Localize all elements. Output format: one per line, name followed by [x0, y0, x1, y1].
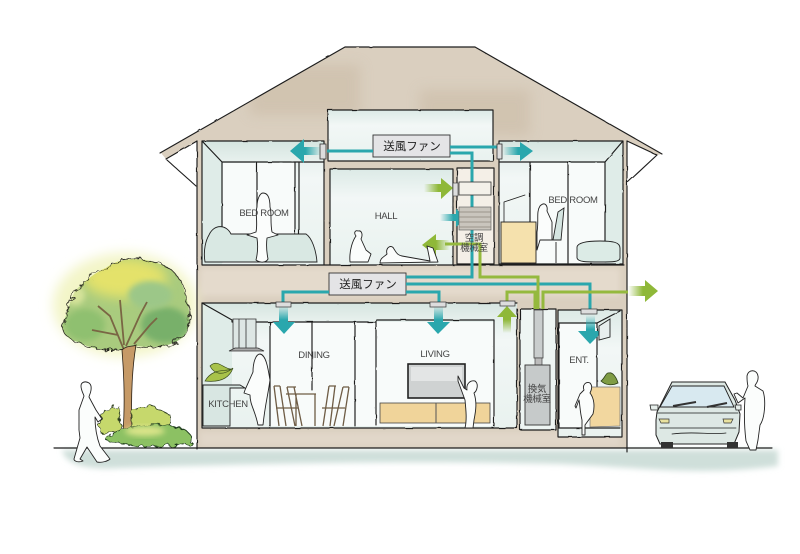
- green exhaust ducts: [445, 244, 628, 309]
- desk: [501, 222, 536, 263]
- tree: [53, 250, 197, 446]
- attic fan room: [328, 110, 493, 161]
- person by car: [734, 371, 765, 450]
- lying person: [380, 246, 438, 263]
- room labels: ENT.: [569, 355, 589, 366]
- wall mirror: [599, 319, 610, 340]
- person walking: [74, 382, 110, 462]
- arrow: teal right upper: [503, 142, 533, 161]
- tree branches: [92, 300, 157, 350]
- roof and walls: [161, 47, 662, 448]
- room labels: LIVING: [420, 349, 450, 360]
- flue pipe: [534, 310, 543, 358]
- wipers: [673, 402, 727, 407]
- child at entrance: [575, 382, 594, 435]
- shoe cabinet: [590, 387, 620, 427]
- entrance room: [558, 310, 622, 437]
- arrow: teal left upper: [290, 139, 321, 163]
- ventilation unit: [525, 365, 550, 425]
- room labels: BED ROOM: [239, 208, 289, 219]
- ground shadow: [62, 450, 778, 471]
- tree trunk: [122, 345, 136, 432]
- shutter panel: [459, 207, 491, 230]
- bumper lines: [657, 413, 738, 434]
- upper fan box: [373, 135, 450, 157]
- vent: exhaust: [500, 301, 515, 306]
- room labels: DINING: [298, 350, 330, 361]
- bed: [204, 227, 317, 262]
- room labels: KITCHEN: [208, 399, 248, 410]
- room labels: [208, 195, 598, 410]
- arrow: teal down entrance: [578, 315, 603, 344]
- air conditioner: [453, 182, 491, 196]
- living room furniture: [380, 364, 490, 428]
- range hood: [233, 319, 256, 349]
- room outlines: [202, 110, 624, 437]
- person at desk: [537, 204, 552, 250]
- wheels: [661, 442, 738, 448]
- lower fan box: [329, 273, 406, 295]
- vent: living: [430, 302, 446, 307]
- hall people: [350, 231, 438, 263]
- room labels: 機械室: [523, 393, 551, 405]
- ottoman: [577, 241, 620, 262]
- kitchen: [203, 319, 270, 426]
- entrance plant: [601, 373, 618, 385]
- right bedroom furniture and person: [501, 195, 620, 263]
- dining set: [274, 386, 349, 426]
- air conditioning closet: [457, 168, 494, 264]
- vent: bedroom left: [320, 144, 326, 159]
- desk lamp: [504, 195, 525, 222]
- sitting person: [350, 231, 371, 262]
- shrubs: [100, 405, 192, 446]
- tv cabinet: [380, 403, 490, 423]
- car body: [656, 382, 740, 444]
- entrance furniture: [575, 319, 620, 435]
- room labels: HALL: [375, 211, 397, 222]
- person on bed: [247, 193, 278, 262]
- vent: dining: [276, 302, 291, 307]
- arrow: green right hall upper: [424, 178, 453, 199]
- mechanical room: [520, 309, 556, 430]
- arrow: teal down dining: [273, 306, 295, 334]
- tree crown: [53, 250, 197, 357]
- lower main room: [202, 303, 517, 428]
- room labels: BED ROOM: [548, 195, 598, 206]
- vent: entrance: [581, 309, 597, 314]
- upper bedroom right room: [499, 141, 623, 264]
- ground line: [54, 447, 772, 449]
- woman: [244, 354, 270, 425]
- room labels: 換気: [528, 383, 547, 395]
- room labels: 空調: [465, 233, 483, 244]
- arrow: green up: [497, 306, 517, 333]
- left bedroom furniture and person: [204, 193, 317, 262]
- arrow: teal right hall: [440, 209, 467, 227]
- arrow: teal down living: [427, 306, 450, 334]
- lower fan box: 送風ファン: [339, 277, 397, 291]
- hall room: [330, 169, 453, 265]
- room labels: 機械室: [460, 242, 488, 254]
- headlights: [659, 419, 733, 423]
- roof outline: [160, 47, 662, 452]
- vent: bedroom right: [497, 144, 502, 159]
- upper bedroom left room: [202, 141, 324, 265]
- counter: [203, 385, 245, 426]
- roof mottling: [200, 65, 620, 446]
- television: [408, 364, 465, 398]
- house outlines: [160, 47, 662, 452]
- arrow: green left hall: [422, 234, 450, 256]
- windshield: [660, 386, 734, 407]
- side mirrors: [650, 405, 741, 410]
- teal supply ducts: [283, 147, 590, 310]
- upper fan box: 送風ファン: [383, 139, 441, 153]
- child at tv: [458, 376, 477, 428]
- chair: [552, 208, 564, 263]
- arrow: green exhaust outside: [628, 280, 658, 302]
- house body: [161, 47, 662, 448]
- plant: [205, 363, 233, 381]
- mechanical room equipment: [525, 310, 550, 425]
- car: [650, 382, 741, 448]
